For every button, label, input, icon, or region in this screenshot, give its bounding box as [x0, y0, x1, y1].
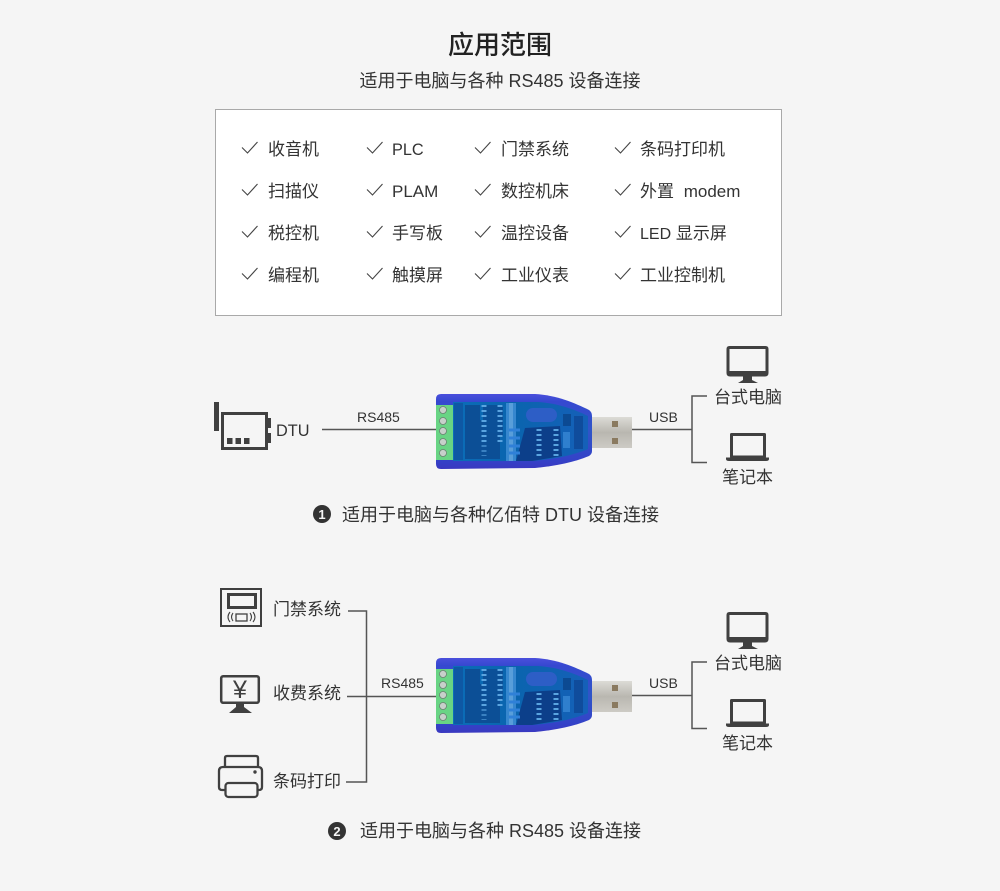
list column 3: 温控设备 — [501, 224, 569, 243]
diagram 1: DTU connection — [214, 348, 782, 487]
check marks — [242, 142, 630, 279]
subtitle: 适用于电脑与各种 RS485 设备连接 — [359, 71, 641, 91]
label: desktop: 台式电脑 — [714, 654, 782, 673]
list column 1: 收音机 — [268, 140, 319, 159]
connector line: RS485 — [322, 428, 436, 430]
list column 2 — [392, 141, 443, 285]
list column 1: 扫描仪 — [268, 182, 319, 201]
icon: desktop computer — [728, 614, 767, 649]
label: barcode printing: 条码打印 — [273, 772, 341, 791]
list column 1 — [268, 140, 319, 285]
diagram 2: RS485 systems — [219, 589, 782, 797]
connector: system bracket — [346, 611, 436, 782]
list column 3: 门禁系统 — [501, 140, 569, 159]
icon: laptop — [726, 434, 769, 461]
list column 2: 手写板 — [392, 224, 443, 243]
caption 2: 2 — [333, 824, 341, 839]
icon: DTU — [214, 402, 271, 448]
label: desktop: 台式电脑 — [714, 388, 782, 407]
icon: desktop computer — [728, 348, 767, 383]
label: laptop: 笔记本 — [722, 734, 773, 753]
caption 1: 1 — [318, 507, 326, 522]
connector: USB bracket — [632, 396, 707, 462]
title: 应用范围 — [448, 30, 552, 60]
connector: USB bracket — [632, 662, 707, 728]
list column 2: PLC — [392, 141, 424, 159]
list column 1: 税控机 — [268, 224, 319, 243]
caption 2: 适用于电脑与各种 RS485 设备连接 — [360, 821, 641, 841]
label: RS485: RS485 — [381, 675, 424, 691]
list column 4: 条码打印机 — [640, 140, 725, 159]
list column 3: 工业仪表 — [501, 266, 569, 285]
label: access control: 门禁系统 — [273, 600, 341, 619]
list column 2: 触摸屏 — [392, 266, 443, 285]
label: DTU: DTU — [276, 422, 309, 440]
list column 3: 数控机床 — [501, 182, 569, 201]
list column 4 — [640, 140, 740, 285]
label: billing system: 收费系统 — [273, 684, 341, 703]
caption 1: 适用于电脑与各种亿佰特 DTU 设备连接 — [342, 505, 659, 525]
label: RS485: RS485 — [357, 409, 400, 425]
list column 4: 工业控制机 — [640, 266, 725, 285]
list column 4: 外置 modem — [640, 182, 740, 201]
device: USB to RS485 converter — [436, 658, 632, 733]
icon: access control — [221, 589, 261, 626]
label: USB: USB — [649, 675, 678, 691]
list column 4: LED 显示屏 — [640, 224, 727, 243]
label: laptop: 笔记本 — [722, 468, 773, 487]
label: USB: USB — [649, 409, 678, 425]
icon: laptop — [726, 700, 769, 727]
icon: billing system — [221, 676, 259, 713]
icon: printer — [219, 756, 262, 797]
panel: application list — [216, 110, 782, 316]
list column 3 — [501, 140, 569, 285]
list column 1: 编程机 — [268, 266, 319, 285]
device: USB to RS485 converter — [436, 394, 632, 469]
list column 2: PLAM — [392, 182, 438, 201]
icon: billing system: ¥ — [232, 676, 247, 704]
